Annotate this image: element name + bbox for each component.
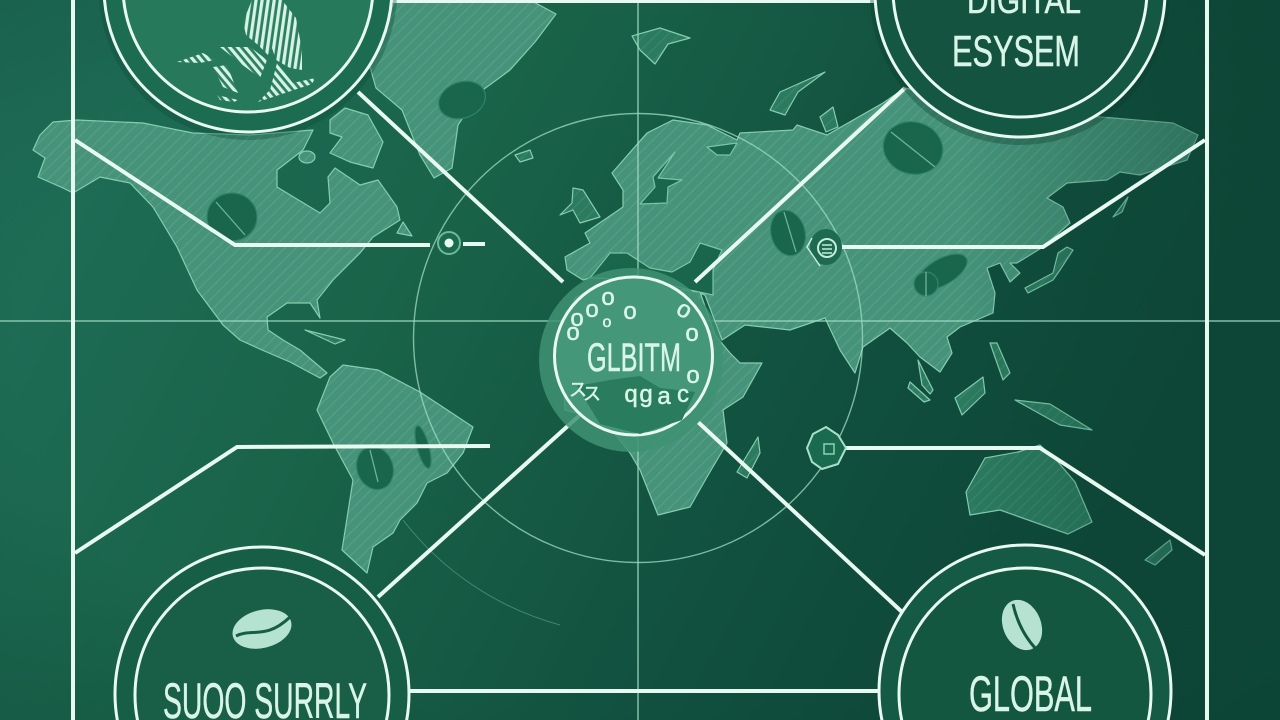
ring of small glyphs: ス bbox=[583, 384, 601, 404]
ring of small glyphs: o bbox=[585, 296, 599, 323]
heading: digital ecosystem: ESYSEM bbox=[952, 27, 1080, 76]
node icon: upper right bbox=[807, 229, 842, 266]
continent: Greenland bbox=[368, 0, 556, 178]
ring of small glyphs: o bbox=[566, 319, 580, 346]
continent: South America bbox=[317, 365, 473, 573]
center badge bbox=[539, 268, 723, 452]
continent: Eurasia bbox=[565, 88, 1198, 373]
island: Baffin bbox=[330, 108, 383, 168]
icon: coffee bean bbox=[228, 603, 296, 655]
coffee beans on map bbox=[207, 75, 973, 495]
ring of small glyphs: a bbox=[657, 383, 671, 410]
inland seas bbox=[590, 143, 737, 295]
ring of small glyphs: o bbox=[672, 295, 697, 325]
island: Hudson bbox=[299, 151, 315, 163]
ring of small glyphs: ス bbox=[569, 380, 587, 400]
ring of small glyphs: o bbox=[623, 298, 637, 325]
island: Newfoundland bbox=[397, 222, 412, 236]
icon: hatched coffee leaves bbox=[177, 0, 315, 102]
ring of small glyphs: o bbox=[603, 314, 612, 331]
dark patch inside badge bbox=[577, 376, 695, 434]
right-side fade bbox=[960, 0, 1280, 720]
node icon: left bbox=[438, 232, 460, 254]
circle panel: top left bbox=[100, 0, 397, 140]
ring of small glyphs: o bbox=[686, 362, 700, 389]
center heading: GLBITM bbox=[587, 336, 681, 380]
ring of small glyphs: o bbox=[570, 305, 584, 332]
bean creases bbox=[216, 132, 935, 482]
islands bbox=[305, 28, 1172, 565]
heading: digital ecosystem bbox=[952, 0, 1081, 76]
circle panel: top right bbox=[870, 0, 1166, 145]
node icon: lower right bbox=[807, 427, 846, 469]
world map bbox=[33, 0, 1198, 573]
continent: North America bbox=[33, 120, 400, 378]
icon: coffee bean bbox=[995, 594, 1049, 656]
ring of small glyphs: q bbox=[624, 381, 638, 408]
continent: Australia bbox=[966, 445, 1092, 534]
ring of small glyphs: g bbox=[639, 381, 653, 408]
radar circle bbox=[403, 114, 862, 625]
ring of small glyphs: c bbox=[677, 381, 689, 408]
ring of small glyphs: o bbox=[601, 284, 615, 311]
continent: Africa bbox=[560, 285, 762, 515]
ring of small glyphs bbox=[566, 284, 700, 410]
circle panel: bottom right bbox=[878, 544, 1172, 720]
ring of small glyphs: o bbox=[685, 320, 699, 347]
circle panel: bottom left bbox=[114, 546, 410, 720]
